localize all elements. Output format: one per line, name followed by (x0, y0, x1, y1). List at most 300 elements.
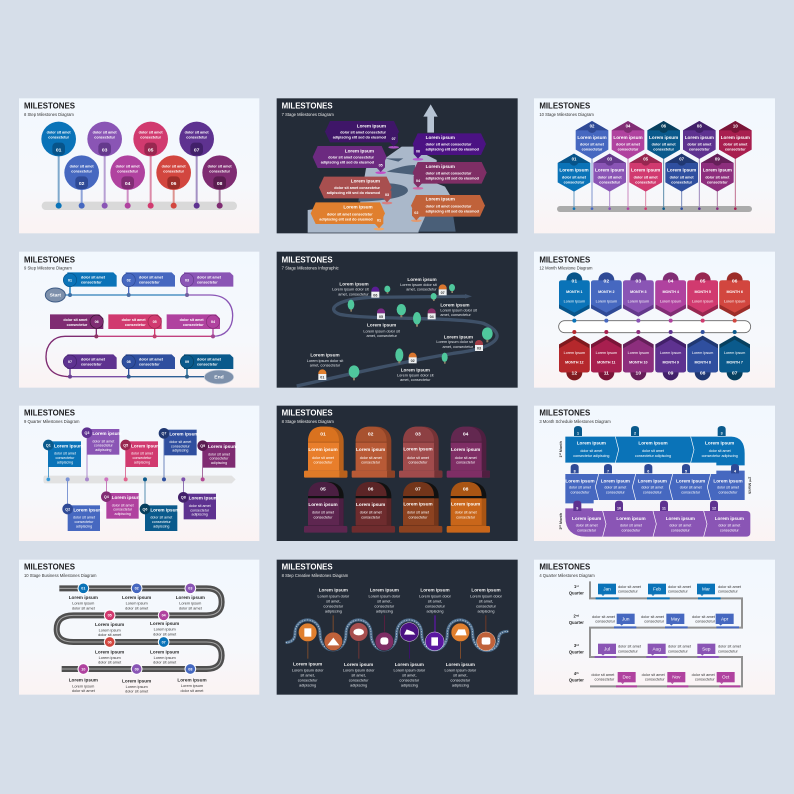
start oval: Start (50, 293, 61, 299)
heading: MILESTONES (539, 563, 590, 572)
label: 2nd month: Month (748, 482, 752, 494)
hexagon 01: dolor sit amet (562, 176, 587, 180)
hexagon 04: Lorem ipsum (613, 135, 643, 140)
month 2 band: 4 (734, 469, 737, 473)
milestone 06 (332, 282, 379, 298)
timeline dots (573, 207, 737, 210)
month 10 (623, 330, 654, 380)
milestone 04 (428, 303, 478, 319)
month Feb: dolor sit amet (668, 585, 692, 589)
quarter 9: consectetur (210, 457, 229, 461)
quarter 7: Lorem ipsum (169, 432, 199, 437)
step 5 node: sit amet, (402, 674, 417, 678)
central rail (559, 321, 751, 333)
stone 01: consectetur (314, 461, 333, 465)
quarter 9: adipiscing (211, 461, 227, 465)
hexagon 09: consectetur (707, 181, 728, 185)
step 1 node (292, 623, 324, 687)
stone 03: Lorem ipsum (403, 446, 433, 451)
quarter 2: Q2 (65, 507, 70, 511)
step 8 node (470, 587, 503, 651)
step 1 node: consectetur (298, 678, 318, 682)
node 04: Lorem ipsum (150, 621, 179, 626)
node 06: 06 (108, 640, 112, 644)
panel: 7 stage milestones infographic (road and houses) (277, 252, 518, 388)
month 1 band: consectetur adipiscing (702, 454, 738, 458)
month Apr: dolor sit amet (692, 615, 716, 619)
month 2 band: Lorem ipsum (638, 479, 667, 484)
hexagon 03: 03 (607, 156, 613, 161)
step 02: dolor sit amet (139, 276, 164, 280)
hexagon 06: 06 (661, 124, 667, 129)
quarter labels: 1 (574, 584, 576, 589)
step 02: 02 (127, 278, 131, 282)
milestone 05: Lorem ipsum dolor sit (363, 329, 401, 333)
month May: consectetur (644, 620, 665, 624)
milestone 03 (436, 335, 483, 351)
node 01: 01 (81, 587, 85, 591)
heading: MILESTONES (539, 255, 590, 264)
heading: MILESTONES (282, 102, 333, 111)
month 12: Lorem Ipsum (564, 351, 585, 355)
quarter 6: consectetur (152, 520, 172, 524)
stone 06: Lorem ipsum (356, 502, 385, 507)
month 1 (559, 272, 590, 323)
hexagon 03: dolor sit amet (598, 176, 622, 180)
stage 07: 07 (194, 148, 200, 154)
month Aug: consectetur (668, 649, 689, 653)
step 3 node: adipiscing (350, 684, 367, 688)
month May: May (671, 616, 680, 621)
quarter 4: Lorem ipsum (112, 495, 141, 500)
month Aug: dolor sit amet (668, 645, 692, 649)
banner 07: adipiscing elit sed do eiusmod (333, 136, 386, 140)
subtitle: 8 Step Milestones Diagram (24, 112, 74, 117)
milestone 07: amet, consectetur (406, 288, 437, 292)
quarter 8 (178, 477, 218, 519)
month 6: MONTH 6 (726, 290, 743, 294)
step 1 node: Lorem ipsum (293, 661, 322, 666)
stage 05 (133, 122, 168, 209)
quarter 4: consectetur (113, 508, 133, 512)
quarter 2: dolor sit amet (73, 516, 95, 520)
month 3 band: Lorem ipsum (572, 516, 601, 521)
node 10 (69, 664, 98, 693)
quarter labels: rd (576, 643, 579, 647)
month Feb (648, 584, 692, 596)
coloured route segments (595, 598, 740, 686)
step 1 node: sit amet, (300, 673, 315, 677)
month 7: Lorem Ipsum (724, 351, 745, 355)
stage 08: 08 (217, 181, 223, 187)
hexagon 10: consectetur (725, 148, 746, 152)
quarter labels: 4 (574, 671, 576, 676)
month 3 band: dolor sit amet (718, 523, 740, 527)
step 09: dolor sit amet (197, 358, 222, 362)
stone 01: Lorem ipsum (308, 447, 338, 452)
stone 03 (399, 427, 442, 478)
month 2 band: 8 (574, 469, 576, 473)
month 3: 03 (636, 278, 641, 284)
banner 03 (319, 177, 392, 204)
month 11: MONTH 11 (597, 360, 615, 364)
month Aug (648, 644, 692, 656)
hexagon 09 (701, 154, 734, 192)
stone 03: dolor sit amet (407, 456, 429, 460)
heading: MILESTONES (282, 409, 333, 418)
month 3 band: Lorem ipsum (616, 516, 646, 521)
node 02 (122, 583, 151, 610)
milestone 01: amet, consectetur (310, 364, 341, 368)
hexagon 10: 10 (733, 124, 738, 129)
month Sep: Sep (702, 646, 711, 651)
step 08 (122, 354, 175, 379)
month Jun (592, 614, 635, 626)
stage 01: consectetur (48, 136, 70, 140)
node 02: dolor sit amet (125, 606, 149, 610)
milestone 01: Lorem ipsum (310, 353, 340, 358)
stone 07: dolor sit amet (407, 511, 429, 515)
quarter 1: dolor sit amet (54, 452, 76, 456)
stone 02: Lorem ipsum (356, 447, 385, 452)
subtitle: 7 Stage Milestones Diagram (282, 112, 334, 117)
quarter 9 (197, 440, 237, 481)
step 5 node: consectetur (399, 679, 420, 683)
month 1 band: 2 (634, 432, 636, 436)
quarter 6: dolor sit amet (150, 516, 172, 520)
step 07: dolor sit amet (81, 358, 106, 362)
stage 08: consectetur (209, 169, 231, 173)
step 4 node: Lorem ipsum (370, 587, 399, 592)
stage 03: dolor sit amet (93, 131, 117, 135)
milestone 03: 03 (477, 347, 481, 351)
node 05: Lorem ipsum (99, 628, 121, 632)
quarter 1: consectetur (56, 456, 75, 460)
panel: 4 quarter milestones diagram (534, 560, 775, 695)
month Oct: dolor sit amet (692, 673, 716, 677)
stone 06 (352, 482, 395, 533)
step 09: 09 (185, 360, 189, 364)
hexagon 07: 07 (679, 156, 685, 161)
banner 03: Lorem ipsum (351, 179, 380, 184)
quarter 5 (120, 440, 160, 481)
quarter 6: adipiscing (153, 524, 169, 528)
subtitle: 7 Stage Milestones Infographic (282, 266, 339, 271)
step 4 node: sit amet, (377, 599, 392, 603)
month 8: 08 (700, 370, 706, 376)
stone 04 (447, 427, 490, 478)
month Jul: dolor sit amet (618, 645, 642, 649)
node 04: dolor sit amet (153, 632, 177, 636)
month Jun: dolor sit amet (592, 615, 616, 619)
month 1 band (565, 426, 745, 465)
banner 04: 04 (416, 179, 421, 183)
node 10: dolor sit amet (72, 689, 96, 693)
node 07: Lorem ipsum (150, 649, 179, 654)
quarter 7: consectetur (171, 444, 191, 448)
month 2 band: consectetur (571, 490, 590, 494)
month Nov: dolor sit amet (642, 673, 666, 677)
month Dec: Dec (623, 675, 631, 680)
stone 08 (447, 482, 490, 533)
stone 07: Lorem ipsum (403, 501, 433, 506)
month 2 band: 6 (647, 469, 649, 473)
quarter 3: Q3 (85, 431, 89, 435)
subtitle: 10 Stage Milestones Diagram (539, 112, 594, 117)
milestone 05: amet, consectetur (366, 334, 398, 338)
month 3: MONTH 3 (630, 290, 647, 294)
stone 03: 03 (415, 431, 421, 437)
winding path (46, 295, 233, 377)
banner 02: dolor sit amet consectetur (426, 204, 472, 208)
step 01 (63, 272, 117, 297)
milestone 06: 06 (373, 293, 377, 297)
panel: 8 stage milestones diagram (tombstones) (277, 406, 518, 541)
month Nov: Nov (672, 675, 681, 680)
milestone 05: 05 (379, 315, 383, 319)
step 05: dolor sit amet (122, 318, 146, 322)
node 06: Lorem ipsum (95, 649, 124, 654)
heading: MILESTONES (24, 102, 75, 111)
milestone 04: Lorem ipsum dolor sit (440, 308, 478, 312)
banner 03: dolor sit amet consectetur (334, 186, 381, 190)
stone 07 (399, 482, 442, 533)
grey route line (590, 581, 742, 686)
stage 06 (156, 155, 191, 209)
stem lines (574, 157, 735, 209)
quarter 9: dolor sit amet (208, 452, 230, 456)
step 4 node (368, 587, 401, 651)
quarter 5: adipiscing (134, 460, 150, 464)
banner 03: 03 (385, 193, 389, 197)
node 10: Lorem ipsum (72, 684, 94, 688)
month 1 band: 1 (577, 432, 579, 436)
node 06: dolor sit amet (98, 661, 122, 665)
step 2 node: adipiscing (325, 609, 342, 613)
heading: MILESTONES (24, 563, 75, 572)
banner 01 (311, 202, 385, 230)
stage 02: consectetur (71, 169, 93, 173)
panel: 7 stage milestones diagram (dark road) (277, 98, 518, 233)
month Mar: dolor sit amet (718, 585, 742, 589)
quarter 8: Lorem ipsum (189, 496, 218, 501)
month Jul: Jul (604, 646, 610, 651)
step 2 node: sit amet, (326, 599, 341, 603)
month 10: 10 (636, 370, 641, 376)
step 3 node (343, 623, 375, 688)
month Apr (692, 614, 734, 626)
milestone 05 (363, 308, 401, 338)
banner 03: adipiscing elit sed do eiusmod (327, 191, 380, 195)
banner 04: Lorem ipsum (426, 164, 455, 169)
step 6 node (419, 587, 452, 651)
month 1 band: 3 (721, 432, 723, 436)
step 8 node: sit amet, (479, 599, 493, 603)
milestone 02: 02 (411, 359, 415, 363)
hexagon 07: consectetur (671, 181, 693, 185)
milestone 04: 04 (430, 315, 435, 319)
month Feb: consectetur (668, 590, 689, 594)
node 06 (95, 637, 124, 665)
month 6: 06 (732, 278, 738, 284)
step 5 node: adipiscing (401, 684, 418, 688)
stage 07: consectetur (186, 136, 208, 140)
step 1 node: adipiscing (299, 683, 316, 687)
node 09: Lorem ipsum (126, 685, 148, 689)
stage 04: consectetur (117, 169, 139, 173)
stage 03 (87, 122, 122, 209)
stage 02: 02 (79, 181, 85, 187)
month 1: 01 (572, 278, 577, 284)
milestone 03: Lorem ipsum dolor sit (436, 340, 474, 344)
stage 02 (64, 155, 99, 209)
step 03: dolor sit amet (197, 276, 222, 280)
month 3 band: 10 (617, 506, 621, 510)
stone 06: 06 (368, 487, 374, 493)
step 8 node: Lorem ipsum dolor (470, 594, 503, 598)
quarter 1 (43, 440, 83, 481)
month 3 band: consectetur (671, 528, 691, 532)
node 02: 02 (135, 587, 139, 591)
quarter labels: st (576, 584, 579, 588)
month 9: MONTH 9 (662, 360, 679, 364)
hexagon 04: consectetur (618, 148, 639, 152)
quarter 2: consectetur (75, 520, 94, 524)
quarter labels: 3 (574, 643, 576, 648)
month Jul (598, 644, 642, 656)
month 2 band: 5 (685, 469, 687, 473)
quarter 9: Q9 (200, 444, 205, 448)
stone 04: dolor sit amet (455, 456, 477, 460)
month Jan (598, 584, 642, 596)
node 01: Lorem ipsum (72, 601, 94, 605)
milestone 06: Lorem ipsum dolor sit (332, 287, 370, 291)
hexagon 08 (683, 121, 716, 159)
step 3 node: sit amet, (351, 674, 366, 678)
hexagon 08: dolor sit amet (687, 143, 712, 147)
month 9: 09 (668, 370, 674, 376)
node 05: 05 (108, 614, 112, 618)
month Mar: consectetur (718, 590, 739, 594)
month 2: Lorem Ipsum (596, 299, 617, 303)
month 7: 07 (732, 370, 738, 376)
hexagon 06 (647, 121, 680, 159)
subtitle: 9 Step Milestone Diagram (24, 266, 72, 271)
quarter 8: consectetur (190, 508, 210, 512)
step 04: consectetur (183, 323, 204, 327)
step 01: 01 (68, 278, 72, 282)
step 6 node: consectetur (425, 604, 446, 608)
step 07: 07 (68, 360, 72, 364)
milestone 03: amet, consectetur (443, 345, 474, 349)
stage 07: dolor sit amet (185, 131, 209, 135)
stage 06: consectetur (163, 169, 185, 173)
month 2 band: dolor sit amet (680, 485, 702, 489)
banner 02 (411, 195, 485, 222)
milestone 07: Lorem ipsum dolor sit (400, 283, 438, 287)
timeline arrow (43, 476, 236, 483)
stage 08 (202, 155, 237, 209)
step 7 node: consectetur (450, 679, 471, 683)
quarter 4: dolor sit amet (112, 503, 134, 507)
month 1 band: dolor sit amet (580, 449, 602, 453)
milestone 07: Lorem ipsum (407, 277, 437, 282)
month 2 band: dolor sit amet (717, 485, 739, 489)
node 09: dolor sit amet (125, 690, 149, 694)
month 1 band: Lorem ipsum (577, 441, 606, 446)
month 3 band: 11 (662, 506, 666, 510)
hexagon 01: Lorem ipsum (559, 168, 589, 173)
month 2 band: dolor sit amet (604, 485, 626, 489)
quarter 1: Q1 (46, 443, 51, 447)
winding road with arrow (297, 294, 497, 386)
node 01: dolor sit amet (72, 606, 96, 610)
hexagon 05: 05 (643, 156, 649, 161)
stone 02: dolor sit amet (360, 456, 382, 460)
step 3 node: Lorem ipsum dolor (343, 669, 375, 673)
hexagon 06: dolor sit amet (652, 143, 676, 147)
step 05 (108, 314, 162, 338)
step 8 node: consectetur (476, 604, 497, 608)
hexagon 04: dolor sit amet (616, 143, 641, 147)
node 03: 03 (188, 587, 192, 591)
banner 07: Lorem ipsum (357, 123, 386, 128)
month 2: MONTH 2 (598, 290, 615, 294)
quarter 6: Q6 (143, 507, 147, 511)
step 6 node: Lorem ipsum dolor (419, 594, 452, 598)
node 09: 09 (135, 667, 139, 671)
month 2 band: Lorem ipsum (565, 479, 595, 484)
subtitle: 4 Quarter Milestones Diagram (539, 573, 595, 578)
stone 05: consectetur (314, 515, 333, 519)
quarter 3: Lorem ipsum (92, 431, 122, 436)
milestone 01: Lorem ipsum dolor sit (307, 359, 344, 363)
stage 01: 01 (56, 148, 62, 154)
quarter 4: adipiscing (115, 512, 131, 516)
month 7: MONTH 7 (726, 360, 743, 364)
month 12: 12 (572, 370, 577, 376)
quarter 2 (62, 477, 103, 531)
month 8 (687, 330, 718, 380)
hexagon 09: 09 (715, 156, 720, 161)
milestone 02 (397, 353, 435, 382)
node 09: Lorem ipsum (122, 678, 151, 683)
step 08: 08 (127, 360, 131, 364)
stone 05: Lorem ipsum (308, 502, 338, 507)
banner 05 (313, 146, 387, 174)
node 03: Lorem ipsum (179, 601, 201, 605)
hexagon 08: Lorem ipsum (685, 135, 714, 140)
month Sep: dolor sit amet (718, 645, 742, 649)
hexagon 06: consectetur (653, 148, 675, 152)
stone 07: 07 (415, 487, 421, 493)
month Nov (642, 672, 685, 684)
label: 2nd month: 2 (748, 477, 752, 479)
node 08 (177, 664, 207, 693)
month 2 band: consectetur (681, 490, 701, 494)
hexagon 01: 01 (572, 156, 577, 161)
stone 08: dolor sit amet (455, 511, 477, 515)
milestone 04: amet, consectetur (440, 313, 471, 317)
month 3 band: 12 (712, 506, 716, 510)
month 11 (591, 330, 622, 380)
month 4 (655, 272, 686, 323)
stage 01 (41, 122, 76, 209)
quarter labels: Quarter (569, 590, 584, 595)
hexagon 01: consectetur (564, 181, 585, 185)
month Dec (591, 672, 636, 684)
month 11: 11 (604, 370, 609, 376)
